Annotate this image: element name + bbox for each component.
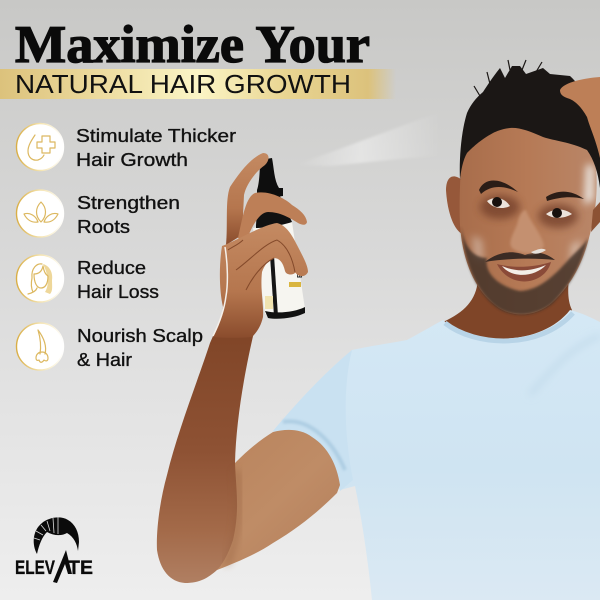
right-side ear sliver: [591, 202, 600, 232]
wrist highlight: [213, 247, 227, 336]
mouth: [497, 262, 551, 281]
nose highlight: [531, 249, 546, 254]
t-shirt: [273, 310, 600, 600]
wordmark: TE: [68, 557, 93, 579]
elbow shadow: [226, 470, 239, 565]
thumb: [226, 153, 269, 245]
subtitle banner: NATURAL HAIR GROWTH: [15, 69, 351, 99]
eyes: [487, 197, 572, 218]
wordmark: [15, 557, 93, 579]
hand with fingers: [213, 153, 308, 338]
logo chevron: [53, 550, 72, 583]
label: Hair Loss: [77, 281, 159, 302]
icon: woman's face: [16, 255, 64, 302]
label: [77, 325, 203, 370]
hand in hair: [560, 77, 600, 158]
title: Maximize Your: [15, 16, 370, 74]
logo: Elevate: [15, 517, 93, 583]
label: [76, 125, 236, 170]
shirt sleeve: [273, 350, 353, 491]
label: Strengthen: [77, 192, 180, 213]
label: Nourish Scalp: [77, 325, 203, 346]
eyebrows: [479, 180, 584, 201]
upper arm: [190, 430, 340, 570]
eye socket shadow: [480, 195, 578, 228]
shirt sleeve fold: [283, 421, 345, 470]
label: Reduce: [77, 257, 146, 278]
raised arm: [157, 320, 340, 583]
hair: [460, 60, 600, 188]
label: & Hair: [77, 349, 132, 370]
palm and lower fingers: [213, 223, 308, 338]
face highlights: [472, 165, 594, 268]
shirt collar: [445, 313, 573, 341]
benefit: strengthen roots: [16, 190, 180, 237]
spray bottle: BIO: [297, 265, 304, 278]
moustache: [485, 252, 555, 262]
index finger: [238, 192, 307, 242]
label: [77, 257, 159, 302]
label: Stimulate Thicker: [76, 125, 236, 146]
nose: [510, 210, 544, 253]
cap: [257, 158, 283, 199]
benefit: reduce hair loss: [16, 255, 159, 302]
icon: hair follicle: [16, 323, 64, 370]
person: [157, 60, 600, 600]
face: [460, 124, 597, 314]
icon: leaves: [16, 190, 64, 237]
label: [77, 192, 180, 237]
label: Hair Growth: [76, 149, 188, 170]
spray bottle: [253, 158, 305, 319]
icon: quiff hair: [34, 517, 79, 554]
label detail: [289, 282, 301, 287]
benefit: nourish scalp and hair: [16, 323, 203, 370]
stray hair strands: [474, 60, 542, 96]
neck: [443, 262, 572, 341]
shirt chest fold: [530, 336, 600, 395]
finger creases: [228, 240, 295, 290]
forearm: [157, 320, 254, 583]
bottle body: [253, 222, 305, 315]
ear: [446, 176, 462, 234]
icon: drop with plus: [16, 124, 64, 170]
benefit: stimulate thicker hair growth: [16, 124, 236, 170]
wordmark: ELEV: [15, 557, 55, 579]
beard: [461, 226, 588, 315]
label: Roots: [77, 216, 130, 237]
